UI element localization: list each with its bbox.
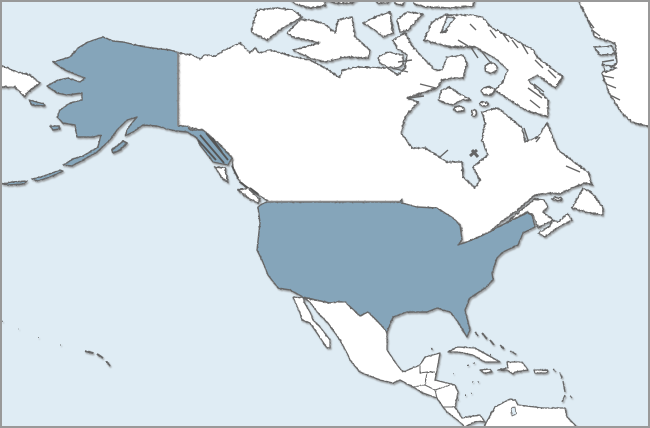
Banks Island <box>251 8 302 40</box>
New Brunswick and Gaspe <box>505 199 553 228</box>
St Lawrence Island <box>29 100 45 106</box>
Haida Gwaii <box>215 167 228 183</box>
Bahamas <box>475 332 516 354</box>
northwest Hawaiian islets <box>2 321 61 345</box>
Greenland fjords <box>588 20 620 100</box>
Kodiak Island <box>112 141 127 153</box>
Somerset Island <box>397 12 423 32</box>
49th parallel <box>267 200 400 202</box>
Anticosti <box>552 198 562 200</box>
coastal fjord detail <box>198 20 620 194</box>
Baffin fjords <box>458 24 556 108</box>
Greenland coastal inlets <box>594 46 616 72</box>
Aleutian Islands <box>2 170 63 185</box>
Lancaster Sound crescent <box>441 17 455 33</box>
Victoria Island <box>287 17 370 62</box>
Mexico and Central America <box>304 298 485 427</box>
country borders <box>413 366 455 407</box>
Baffin and Devon Islands <box>424 15 563 117</box>
Puerto Rico <box>534 370 548 373</box>
Hawaii <box>85 351 110 366</box>
United States and Alaska <box>2 37 535 366</box>
Southampton Island <box>438 87 471 105</box>
Belcher Islands <box>470 150 478 157</box>
King William Island <box>378 52 403 68</box>
contiguous United States <box>257 199 535 337</box>
Lake Maracaibo <box>511 407 516 416</box>
land masses <box>0 0 650 245</box>
Newfoundland <box>572 188 603 215</box>
Chukotka <box>0 65 40 97</box>
Baja California <box>293 297 330 348</box>
Mexico, Central America and Caribbean <box>293 297 578 428</box>
Nunivak Island <box>50 126 60 130</box>
Greenland <box>578 0 650 127</box>
Canadian coast notches <box>392 60 580 172</box>
Foxe Basin island <box>485 63 497 73</box>
Canada mainland <box>178 33 592 245</box>
northern arctic islands <box>413 0 475 8</box>
Alaska <box>47 37 232 166</box>
small Caribbean islands <box>431 349 491 400</box>
Lesser Antilles <box>553 369 572 402</box>
Cuba <box>448 347 500 362</box>
Vancouver Island <box>238 188 260 203</box>
Nova Scotia <box>538 214 572 237</box>
Coats and Mansel Islands <box>482 87 494 95</box>
Alaska panhandle archipelago <box>198 133 258 194</box>
straight boundaries <box>178 52 400 202</box>
Prince of Wales Island <box>363 12 393 37</box>
Hispaniola <box>498 362 528 374</box>
Alaska border <box>177 52 179 126</box>
South America <box>483 399 578 428</box>
Jamaica <box>480 369 492 373</box>
